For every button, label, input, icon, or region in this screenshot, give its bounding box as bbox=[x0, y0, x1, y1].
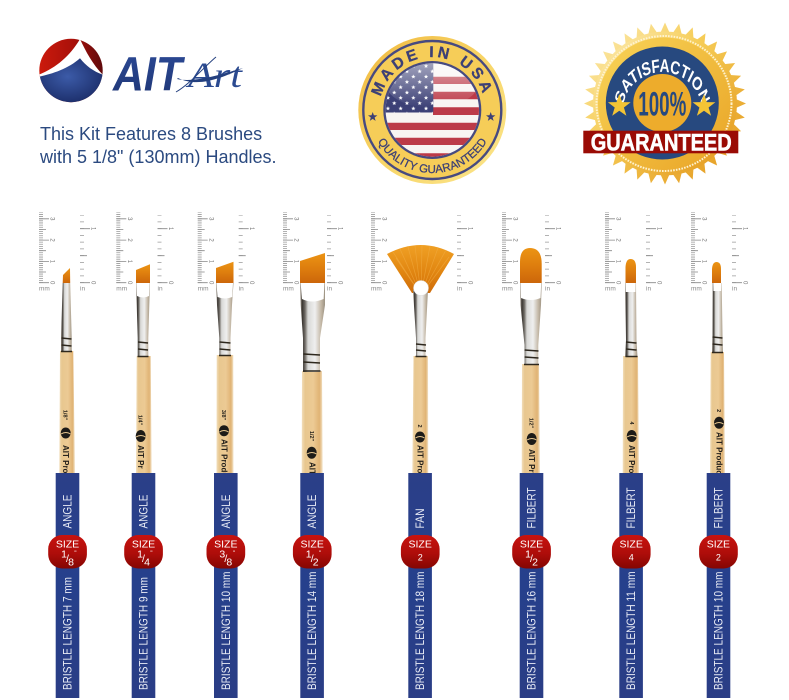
ruler 7: 3 bbox=[615, 217, 621, 221]
ruler 1: 0 bbox=[49, 281, 55, 285]
label band 4: " bbox=[319, 551, 321, 557]
ruler 1: 0 bbox=[90, 281, 96, 285]
ruler 4: 1 bbox=[336, 227, 342, 231]
ruler 4: in bbox=[327, 286, 332, 292]
ruler 1: 2 bbox=[49, 238, 55, 242]
ruler 4: 1 bbox=[293, 260, 299, 264]
label band 7: FILBERT bbox=[626, 488, 638, 528]
badge: made in USA bbox=[358, 36, 506, 184]
ruler 4: 3 bbox=[293, 217, 299, 221]
brush 6: filbert 1/2: 1/2" bbox=[528, 418, 534, 429]
ruler 3: 0 bbox=[207, 281, 213, 285]
ruler 5: 1 bbox=[466, 227, 472, 231]
label band 1: ANGLE bbox=[62, 494, 74, 528]
label band 2 bbox=[124, 473, 163, 698]
ruler 3: mm bbox=[198, 286, 209, 292]
label band 5: 2 bbox=[418, 553, 423, 563]
label band 2: SIZE bbox=[132, 538, 155, 550]
brush 7: filbert 4: 4 bbox=[628, 421, 634, 425]
label band 1: 8 bbox=[68, 556, 74, 568]
ruler 7: 1 bbox=[615, 260, 621, 264]
ruler 3 bbox=[198, 212, 254, 292]
ruler 6 bbox=[502, 212, 560, 292]
label band 8 bbox=[699, 473, 738, 698]
ruler 2: 2 bbox=[126, 238, 132, 242]
ruler 2: 1 bbox=[167, 227, 173, 231]
label band 3: ANGLE bbox=[221, 494, 233, 528]
ruler 7: 0 bbox=[656, 281, 662, 285]
ruler 4: 2 bbox=[293, 238, 299, 242]
ruler 1: 1 bbox=[49, 260, 55, 264]
label band 1: 1 bbox=[61, 548, 67, 560]
kit description text: with 5 1/8" (130mm) Handles. bbox=[39, 147, 276, 167]
ruler 5: 1 bbox=[381, 260, 387, 264]
brand wordmark: Art bbox=[186, 55, 243, 95]
label band 4: / bbox=[311, 553, 314, 565]
badge: satisfaction guaranteed bbox=[583, 22, 746, 184]
label band 4 bbox=[293, 473, 332, 698]
ruler 3: 2 bbox=[207, 238, 213, 242]
badge: made in USA: QUALITY GUARANTEED bbox=[378, 138, 486, 174]
label band 6: 2 bbox=[532, 556, 538, 568]
ruler 2: 3 bbox=[126, 217, 132, 221]
label band 1: / bbox=[66, 553, 69, 565]
label band 3: SIZE bbox=[214, 538, 237, 550]
brush 3: angle 3/8: AIT Produ bbox=[220, 439, 228, 477]
ruler 3: in bbox=[239, 286, 244, 292]
label band 3: 3 bbox=[219, 548, 225, 560]
label band 7 bbox=[612, 473, 651, 698]
ruler 4: 0 bbox=[293, 281, 299, 285]
ruler 1: 1 bbox=[90, 227, 96, 231]
ruler 8: 3 bbox=[701, 217, 707, 221]
brush 5: fan 2: AIT Pro bbox=[416, 445, 424, 474]
brush 4: angle 1/2 bbox=[300, 253, 325, 475]
label band 6: / bbox=[530, 553, 533, 565]
label band 4: 1 bbox=[306, 548, 312, 560]
ruler 5 bbox=[371, 212, 472, 292]
ruler 7: 2 bbox=[615, 238, 621, 242]
badge: satisfaction guaranteed: GUARANTEED bbox=[591, 130, 732, 156]
ruler 1 bbox=[39, 212, 96, 292]
ruler 3: 1 bbox=[248, 227, 254, 231]
label band 7: BRISTLE LENGTH 11 mm bbox=[626, 572, 638, 690]
kit description text bbox=[39, 124, 276, 167]
ruler 7 bbox=[605, 212, 662, 292]
ruler 7: 0 bbox=[615, 281, 621, 285]
label band 6: BRISTLE LENGTH 16 mm bbox=[526, 572, 538, 690]
label band 4: 2 bbox=[313, 556, 319, 568]
brush 2: angle 1/4: 1/4" bbox=[137, 415, 143, 426]
ruler 4: 0 bbox=[336, 281, 342, 285]
ruler 5: in bbox=[457, 286, 462, 292]
ruler 7: in bbox=[646, 286, 651, 292]
brush 3: angle 3/8: 3/8" bbox=[220, 410, 226, 421]
ruler 2: 0 bbox=[126, 281, 132, 285]
label band 2: " bbox=[150, 551, 153, 557]
label band 2: 1 bbox=[137, 548, 143, 560]
kit description text: This Kit Features 8 Brushes bbox=[40, 124, 262, 144]
brush 2: angle 1/4 bbox=[136, 264, 152, 474]
label band 7: SIZE bbox=[620, 538, 643, 550]
label band 6: " bbox=[538, 551, 541, 557]
label band 4: BRISTLE LENGTH 14 mm bbox=[307, 572, 319, 690]
label band 3: 8 bbox=[226, 556, 232, 568]
ruler 6: 2 bbox=[512, 238, 518, 242]
ruler 7: mm bbox=[605, 286, 616, 292]
badge: satisfaction guaranteed: SATISFACTION bbox=[615, 59, 710, 102]
badge: made in USA: MADE IN USA bbox=[370, 46, 492, 96]
ruler 6: 1 bbox=[512, 260, 518, 264]
ruler 8: in bbox=[732, 286, 737, 292]
brush 1: angle 1/8: 1/8" bbox=[62, 410, 68, 421]
brush 7: filbert 4 bbox=[623, 259, 639, 474]
ruler 8: 0 bbox=[701, 281, 707, 285]
brush 4: angle 1/2: AIT bbox=[308, 462, 316, 475]
badge: satisfaction guaranteed: 100% bbox=[638, 86, 686, 124]
ruler 8 bbox=[691, 212, 748, 292]
label band 3 bbox=[206, 473, 245, 698]
brush 6: filbert 1/2: AIT Pr bbox=[527, 449, 536, 473]
ruler 3: 0 bbox=[248, 281, 254, 285]
ruler 8: 0 bbox=[742, 281, 748, 285]
brush 5: fan 2: 2 bbox=[416, 424, 422, 428]
label band 3: BRISTLE LENGTH 10 mm bbox=[221, 572, 233, 690]
ruler 2 bbox=[116, 212, 173, 292]
logo emblem bbox=[38, 38, 104, 104]
ruler 5: 0 bbox=[381, 281, 387, 285]
brush 3: angle 3/8 bbox=[216, 262, 234, 477]
ruler 6: in bbox=[545, 286, 550, 292]
label band 6: SIZE bbox=[520, 538, 543, 550]
brush 8: filbert 2: 2 bbox=[715, 409, 721, 412]
label band 1 bbox=[48, 473, 87, 698]
label band 6: 1 bbox=[525, 548, 531, 560]
ruler 1: mm bbox=[39, 286, 50, 292]
brush 4: angle 1/2: 1/2" bbox=[308, 431, 314, 442]
label band 5 bbox=[401, 473, 440, 698]
brush 8: filbert 2: AIT Produc bbox=[714, 432, 724, 475]
ruler 6: mm bbox=[502, 286, 513, 292]
label band 4: SIZE bbox=[301, 538, 324, 550]
ruler 5: mm bbox=[371, 286, 382, 292]
brand wordmark bbox=[112, 48, 243, 102]
ruler 2: mm bbox=[116, 286, 127, 292]
ruler 6: 3 bbox=[512, 217, 518, 221]
ruler 8: 1 bbox=[701, 260, 707, 264]
label band 5: SIZE bbox=[409, 538, 432, 550]
ruler 4 bbox=[283, 212, 342, 292]
brush 1: angle 1/8 bbox=[59, 268, 75, 474]
ruler 5: 2 bbox=[381, 238, 387, 242]
label band 8: 2 bbox=[716, 553, 721, 563]
brush 8: filbert 2 bbox=[710, 262, 725, 475]
ruler 6: 0 bbox=[554, 281, 560, 285]
ruler 8: mm bbox=[691, 286, 702, 292]
brush 5: fan 2 bbox=[387, 245, 454, 474]
label band 2: 4 bbox=[144, 556, 150, 568]
label band 7: 4 bbox=[629, 553, 634, 563]
label band 1: BRISTLE LENGTH 7 mm bbox=[62, 577, 74, 690]
label band 8: SIZE bbox=[707, 538, 730, 550]
brush 1: angle 1/8: AIT Pro bbox=[61, 445, 70, 474]
brush 7: filbert 4: AIT Pro bbox=[627, 445, 636, 474]
ruler 6: 0 bbox=[512, 281, 518, 285]
label band 2: / bbox=[142, 553, 145, 565]
brand wordmark: AIT bbox=[112, 48, 185, 102]
label band 8: BRISTLE LENGTH 10 mm bbox=[713, 572, 725, 690]
ruler 7: 1 bbox=[656, 227, 662, 231]
ruler 6: 1 bbox=[554, 227, 560, 231]
brush 2: angle 1/4: AIT Pr bbox=[136, 445, 145, 469]
label band 2: BRISTLE LENGTH 9 mm bbox=[138, 577, 150, 690]
label band 6: FILBERT bbox=[526, 488, 538, 528]
ruler 3: 3 bbox=[207, 217, 213, 221]
brush 6: filbert 1/2 bbox=[520, 248, 542, 474]
label band 4: ANGLE bbox=[307, 494, 319, 528]
ruler 1: 3 bbox=[49, 217, 55, 221]
ruler 4: mm bbox=[283, 286, 294, 292]
label band 1: " bbox=[74, 551, 77, 557]
ruler 8: 2 bbox=[701, 238, 707, 242]
label band 1: SIZE bbox=[56, 538, 79, 550]
label band 3: / bbox=[224, 553, 227, 565]
ruler 1: in bbox=[80, 286, 85, 292]
ruler 2: in bbox=[158, 286, 163, 292]
label band 3: " bbox=[233, 551, 235, 557]
label band 5: BRISTLE LENGTH 18 mm bbox=[415, 572, 427, 690]
ruler 2: 1 bbox=[126, 260, 132, 264]
ruler 8: 1 bbox=[742, 227, 748, 231]
ruler 5: 0 bbox=[466, 281, 472, 285]
label band 5: FAN bbox=[415, 508, 427, 528]
ruler 3: 1 bbox=[207, 260, 213, 264]
label band 8: FILBERT bbox=[713, 488, 725, 528]
ruler 2: 0 bbox=[167, 281, 173, 285]
label band 2: ANGLE bbox=[138, 494, 150, 528]
label band 6 bbox=[512, 473, 551, 698]
ruler 5: 3 bbox=[381, 217, 387, 221]
